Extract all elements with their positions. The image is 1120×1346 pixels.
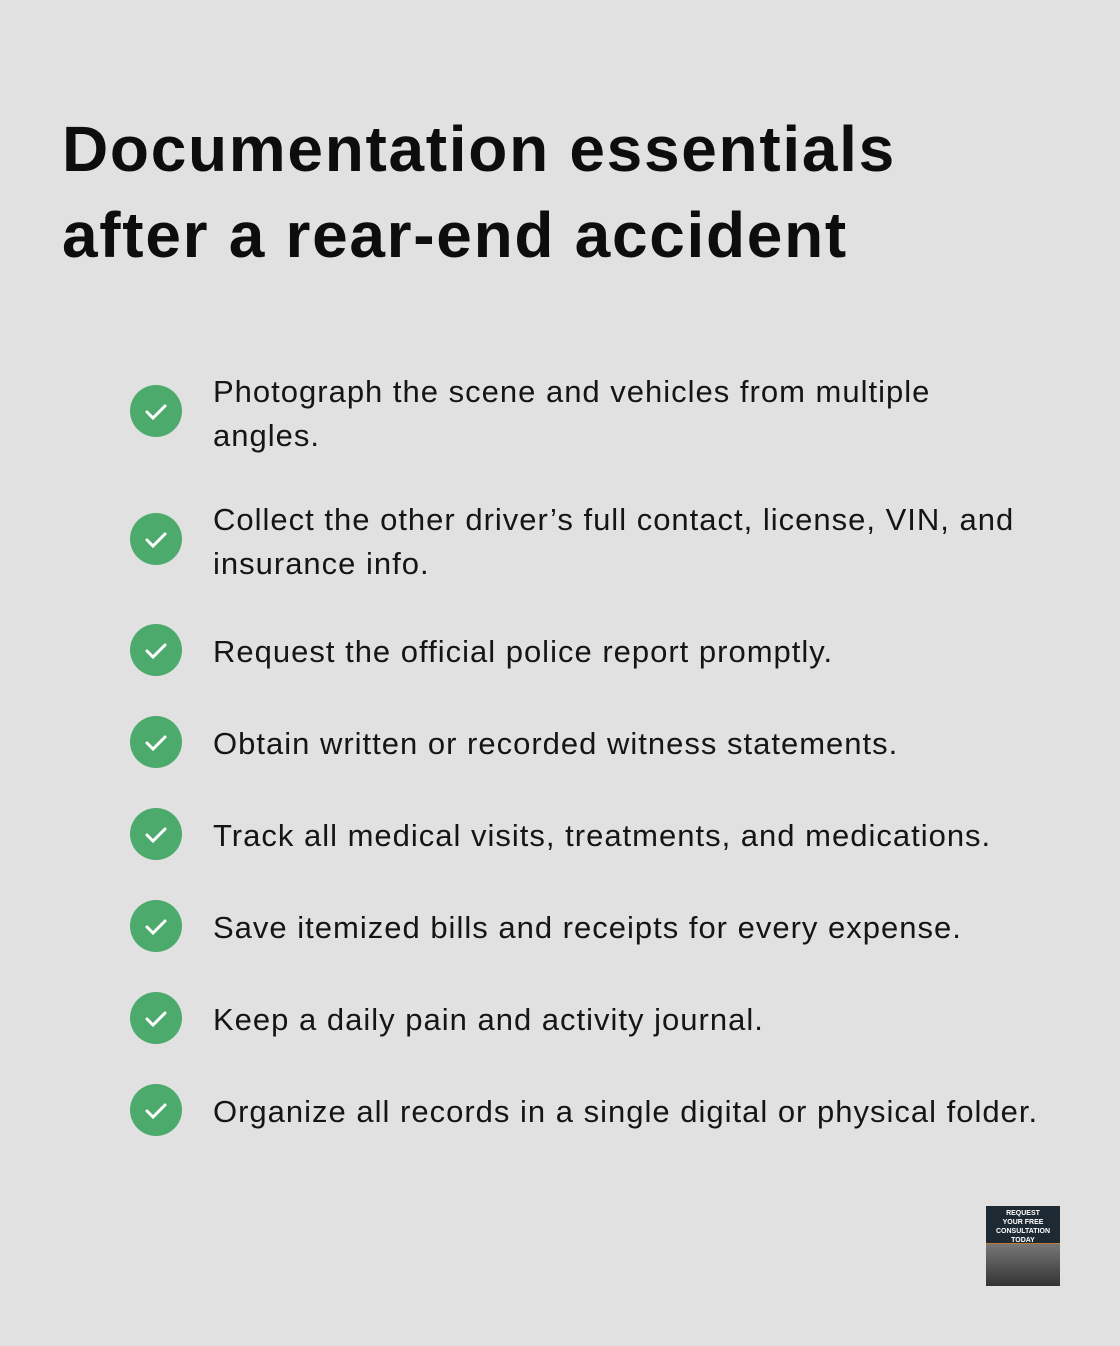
logo: consultation badge: YOUR FREE bbox=[1003, 1219, 1043, 1226]
logo: consultation badge: TODAY bbox=[1011, 1237, 1035, 1244]
title: after a rear-end accident bbox=[62, 199, 848, 271]
item 7: Keep a daily pain and activity journal. bbox=[213, 1002, 764, 1037]
item 8 bbox=[130, 1084, 1038, 1136]
item 2: Collect the other driver’s full contact, license, VIN, and bbox=[213, 502, 1014, 537]
item 4: Obtain written or recorded witness statements. bbox=[213, 726, 898, 761]
item 1 bbox=[130, 374, 930, 453]
item 6 bbox=[130, 900, 962, 952]
item 3: Request the official police report promptly. bbox=[213, 634, 833, 669]
item 5 bbox=[130, 808, 991, 860]
item 5: Track all medical visits, treatments, and medications. bbox=[213, 818, 991, 853]
item 1: angles. bbox=[213, 418, 320, 453]
item 3 bbox=[130, 624, 833, 676]
item 8: Organize all records in a single digital or physical folder. bbox=[213, 1094, 1038, 1129]
title: Documentation essentials bbox=[62, 113, 896, 185]
logo: consultation badge: CONSULTATION bbox=[996, 1228, 1050, 1235]
logo: consultation badge: REQUEST bbox=[1006, 1210, 1040, 1217]
item 2 bbox=[130, 502, 1014, 581]
title bbox=[62, 113, 896, 271]
item 1: Photograph the scene and vehicles from multiple bbox=[213, 374, 930, 409]
item 7 bbox=[130, 992, 764, 1044]
item 2: insurance info. bbox=[213, 546, 430, 581]
item 4 bbox=[130, 716, 898, 768]
logo: consultation badge bbox=[986, 1206, 1060, 1286]
item 6: Save itemized bills and receipts for every expense. bbox=[213, 910, 962, 945]
